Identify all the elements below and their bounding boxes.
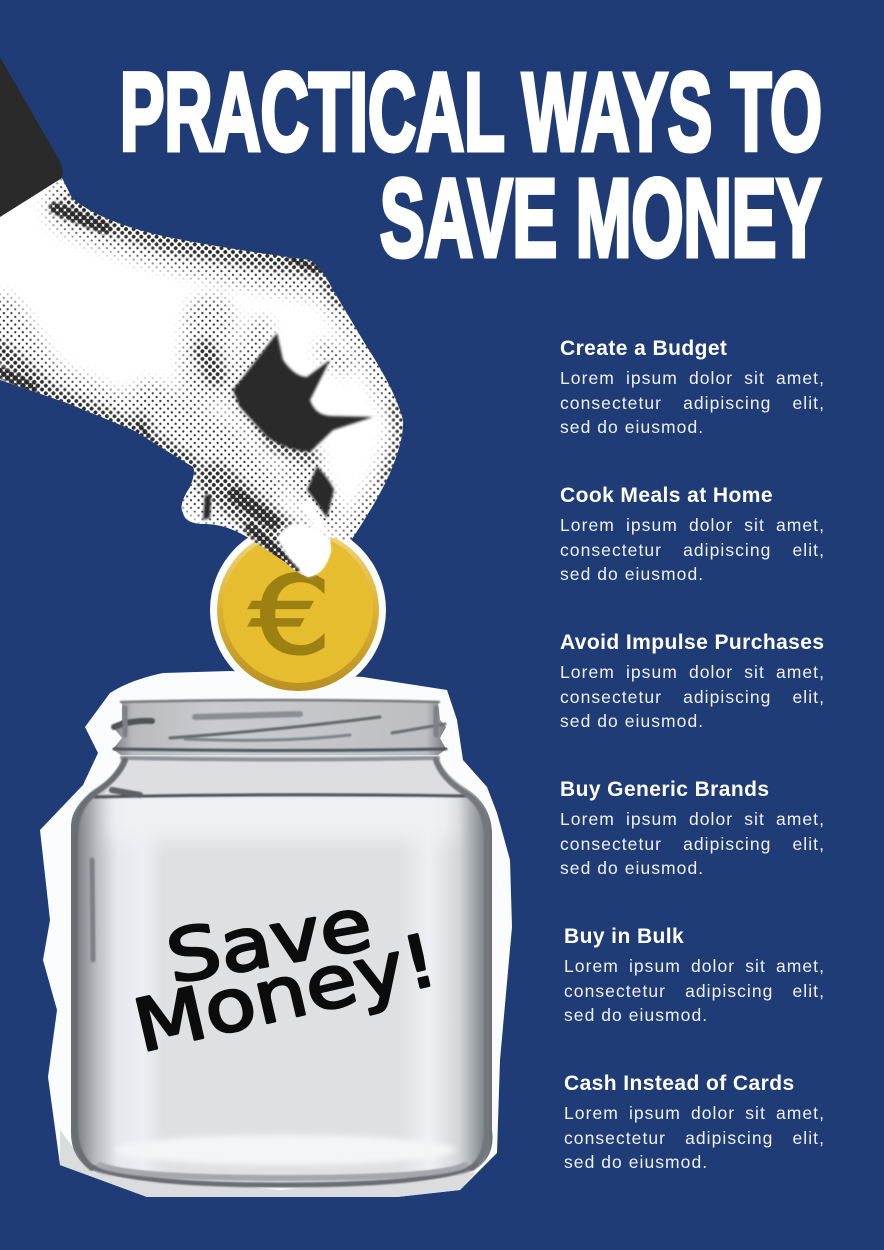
tip: Create a Budget: sed do eiusmod.	[560, 417, 704, 437]
tip: Cash Instead of Cards: consectetur adipiscing elit,	[564, 1128, 825, 1148]
tip: Create a Budget	[560, 337, 825, 437]
tip: Cook Meals at Home: consectetur adipiscing elit,	[560, 540, 825, 560]
tip: Cook Meals at Home: Lorem ipsum dolor sit amet,	[560, 515, 825, 535]
fingertip	[277, 524, 331, 577]
tip: Cash Instead of Cards	[564, 1072, 825, 1172]
tip: Create a Budget: Create a Budget	[560, 337, 727, 360]
tip: Buy in Bulk	[564, 925, 825, 1025]
hand with coat sleeve	[0, 57, 420, 590]
tip: Avoid Impulse Purchases: consectetur adipiscing elit,	[560, 686, 825, 706]
halftone shading	[0, 178, 403, 574]
tip: Cash Instead of Cards: sed do eiusmod.	[564, 1152, 708, 1172]
shadow between fingers	[233, 333, 373, 452]
tip: Create a Budget: Lorem ipsum dolor sit amet,	[560, 368, 825, 388]
tip: Buy in Bulk: Lorem ipsum dolor sit amet,	[564, 956, 825, 976]
tip: Buy in Bulk: consectetur adipiscing elit,	[564, 980, 825, 1000]
tip: Cook Meals at Home	[560, 484, 825, 584]
tip: Buy in Bulk: Buy in Bulk	[564, 925, 684, 948]
jar details	[75, 700, 487, 1185]
sticker shadow band	[60, 1130, 476, 1197]
tip: Cash Instead of Cards: Lorem ipsum dolor sit amet,	[564, 1103, 825, 1123]
tip: Avoid Impulse Purchases: Lorem ipsum dolor sit amet,	[560, 662, 825, 682]
coat sleeve	[0, 57, 63, 217]
tip: Buy Generic Brands: consectetur adipiscing elit,	[560, 834, 825, 854]
jar base highlight	[115, 1135, 455, 1165]
handwritten label: Save Money!: Save	[160, 881, 378, 1000]
tip: Buy in Bulk: sed do eiusmod.	[564, 1005, 708, 1025]
hand shape	[0, 178, 403, 577]
euro symbol: €	[249, 554, 332, 679]
tip: Buy Generic Brands: sed do eiusmod.	[560, 858, 704, 878]
jar neck	[113, 700, 446, 755]
coin	[210, 522, 386, 698]
handwritten label: Save Money!: Money!	[126, 917, 445, 1069]
tip: Avoid Impulse Purchases: Avoid Impulse Purchases	[560, 631, 824, 654]
tip: Buy Generic Brands: Buy Generic Brands	[560, 778, 769, 801]
jar glass	[71, 700, 493, 1187]
tip: Buy Generic Brands	[560, 778, 825, 878]
tip: Cook Meals at Home: Cook Meals at Home	[560, 484, 773, 507]
tip: Create a Budget: consectetur adipiscing elit,	[560, 392, 825, 412]
tip: Avoid Impulse Purchases	[560, 631, 825, 731]
tip: Avoid Impulse Purchases: sed do eiusmod.	[560, 711, 704, 731]
sticker outline	[40, 671, 512, 1197]
tip: Cash Instead of Cards: Cash Instead of Cards	[564, 1072, 795, 1095]
handwritten label: Save Money!	[126, 881, 445, 1069]
jar with sticker backing	[40, 671, 512, 1197]
tip: Buy Generic Brands: Lorem ipsum dolor sit amet,	[560, 809, 825, 829]
tip: Cook Meals at Home: sed do eiusmod.	[560, 564, 704, 584]
title	[120, 51, 822, 280]
